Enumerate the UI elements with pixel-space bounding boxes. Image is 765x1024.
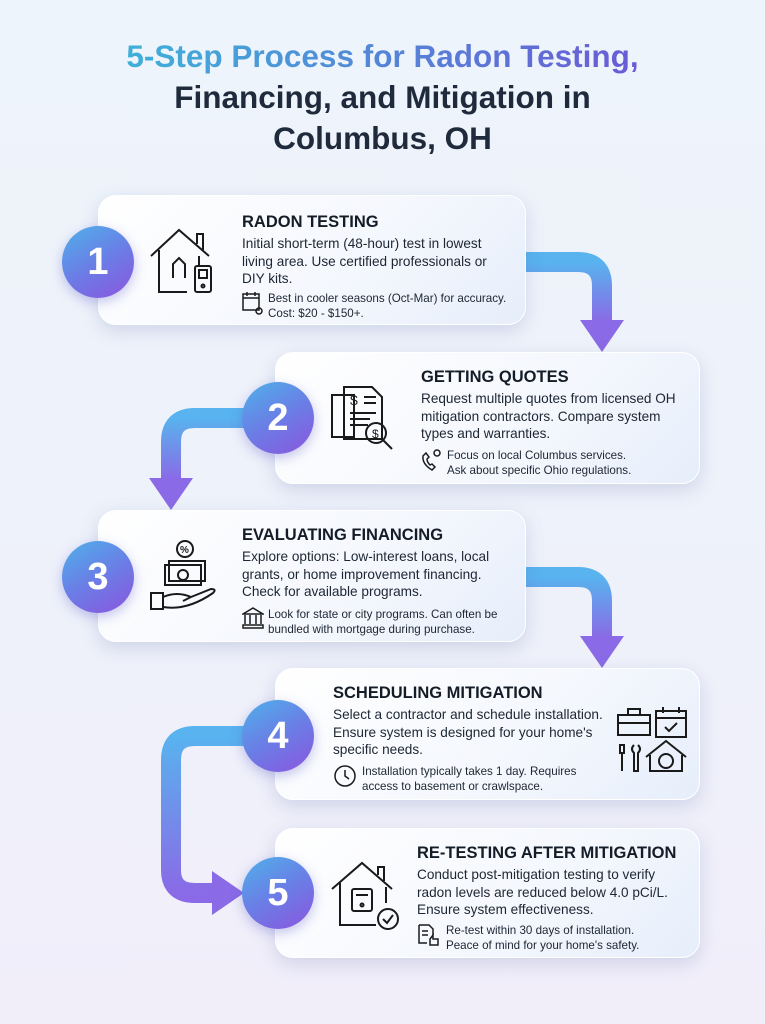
text: step 1 xyxy=(242,213,487,286)
icon: quote documents xyxy=(331,386,393,450)
icon: house with check xyxy=(331,862,399,930)
text: step 5: RE-TESTING AFTER MITIGATION xyxy=(417,844,676,862)
badge 5 xyxy=(242,857,314,929)
title xyxy=(126,38,639,156)
text: step 3: grants, or home improvement financing. xyxy=(242,566,482,582)
panel: step 5 xyxy=(275,828,700,958)
icon: hand with money: % xyxy=(180,545,189,556)
panel: step 3 xyxy=(98,510,526,642)
note: step 3: Look for state or city programs. Can often be xyxy=(268,608,497,621)
note: step 1 xyxy=(268,292,506,320)
text: step 3 xyxy=(242,526,489,599)
badge 4 xyxy=(242,700,314,772)
text: step 1: DIY kits. xyxy=(242,271,292,286)
text: step 5 xyxy=(417,844,676,917)
icon: tools calendar fan house xyxy=(617,707,687,772)
badge 3: 3 xyxy=(87,556,109,598)
arrow 4 to 5 xyxy=(171,736,250,915)
panel: step 1 xyxy=(98,195,526,325)
badge 2 xyxy=(242,382,314,454)
note: step 3 xyxy=(268,608,497,636)
text: step 1: RADON TESTING xyxy=(242,213,379,231)
text: step 4 xyxy=(333,684,603,757)
icon: hand with money xyxy=(150,540,216,610)
note: step 2: Focus on local Columbus services. xyxy=(447,449,626,462)
text: step 2: GETTING QUOTES xyxy=(421,368,569,386)
badge 3 xyxy=(62,541,134,613)
icon: calendar thermometer xyxy=(242,292,263,315)
text: step 2: mitigation contractors. Compare system xyxy=(421,408,660,424)
text: step 5: Ensure system effectiveness. xyxy=(417,902,594,917)
note: step 1: Cost: $20 - $150+. xyxy=(268,307,364,320)
badge 5: 5 xyxy=(267,872,289,914)
note: step 5 xyxy=(446,924,639,952)
text: step 2: Request multiple quotes from licensed OH xyxy=(421,391,676,406)
note: step 5: Peace of mind for your home's safety. xyxy=(446,939,639,952)
text: step 2 xyxy=(421,368,676,441)
badge 2: 2 xyxy=(267,397,289,439)
panel: step 4 xyxy=(275,668,700,800)
text: step 4: Select a contractor and schedule installation. xyxy=(333,707,603,722)
note: step 5: Re-test within 30 days of installation. xyxy=(446,924,634,937)
text: step 2: types and warranties. xyxy=(421,426,550,441)
arrow 3 to 4 xyxy=(520,577,624,668)
note: step 2: Ask about specific Ohio regulations. xyxy=(447,464,631,477)
text: step 1: Initial short-term (48-hour) test in lowest xyxy=(242,236,481,251)
text: step 3: Explore options: Low-interest loans, local xyxy=(242,549,489,564)
note: step 4: access to basement or crawlspace. xyxy=(362,780,543,793)
icon: bank xyxy=(242,607,264,629)
text: step 1: living area. Use certified professionals or xyxy=(242,254,487,268)
note: step 2 xyxy=(447,449,631,477)
text: step 4: Ensure system is designed for your home's xyxy=(333,724,592,740)
icon: clock xyxy=(334,765,356,787)
icon: house with radon detector xyxy=(150,228,212,293)
icon: document thumbs up xyxy=(418,924,439,946)
text: step 5: Conduct post-mitigation testing to verify xyxy=(417,867,655,882)
note: step 4: Installation typically takes 1 day. Requires xyxy=(362,765,576,778)
note: step 1: Best in cooler seasons (Oct-Mar) for accuracy. xyxy=(268,292,506,305)
badge 4: 4 xyxy=(267,715,289,757)
title: Columbus, OH xyxy=(273,120,492,156)
icon: phone location xyxy=(422,449,441,471)
note: step 3: bundled with mortgage during purchase. xyxy=(268,623,475,636)
text: step 3: EVALUATING FINANCING xyxy=(242,526,443,544)
title: Financing, and Mitigation in xyxy=(174,79,591,115)
icon: quote documents: $ xyxy=(372,427,379,441)
title: 5-Step Process for Radon Testing, xyxy=(126,38,639,74)
badge 1 xyxy=(62,226,134,298)
text: step 3: Check for available programs. xyxy=(242,584,423,599)
icon: quote documents: $ xyxy=(350,392,358,408)
arrow 1 to 2 xyxy=(520,262,624,352)
badge 1: 1 xyxy=(87,241,109,283)
note: step 4 xyxy=(362,765,576,793)
text: step 4: specific needs. xyxy=(333,742,423,757)
arrow 2 to 3 xyxy=(149,418,250,510)
text: step 5: radon levels are reduced below 4.0 pCi/L. xyxy=(417,884,668,900)
panel: step 2 xyxy=(275,352,700,484)
text: step 4: SCHEDULING MITIGATION xyxy=(333,684,543,702)
